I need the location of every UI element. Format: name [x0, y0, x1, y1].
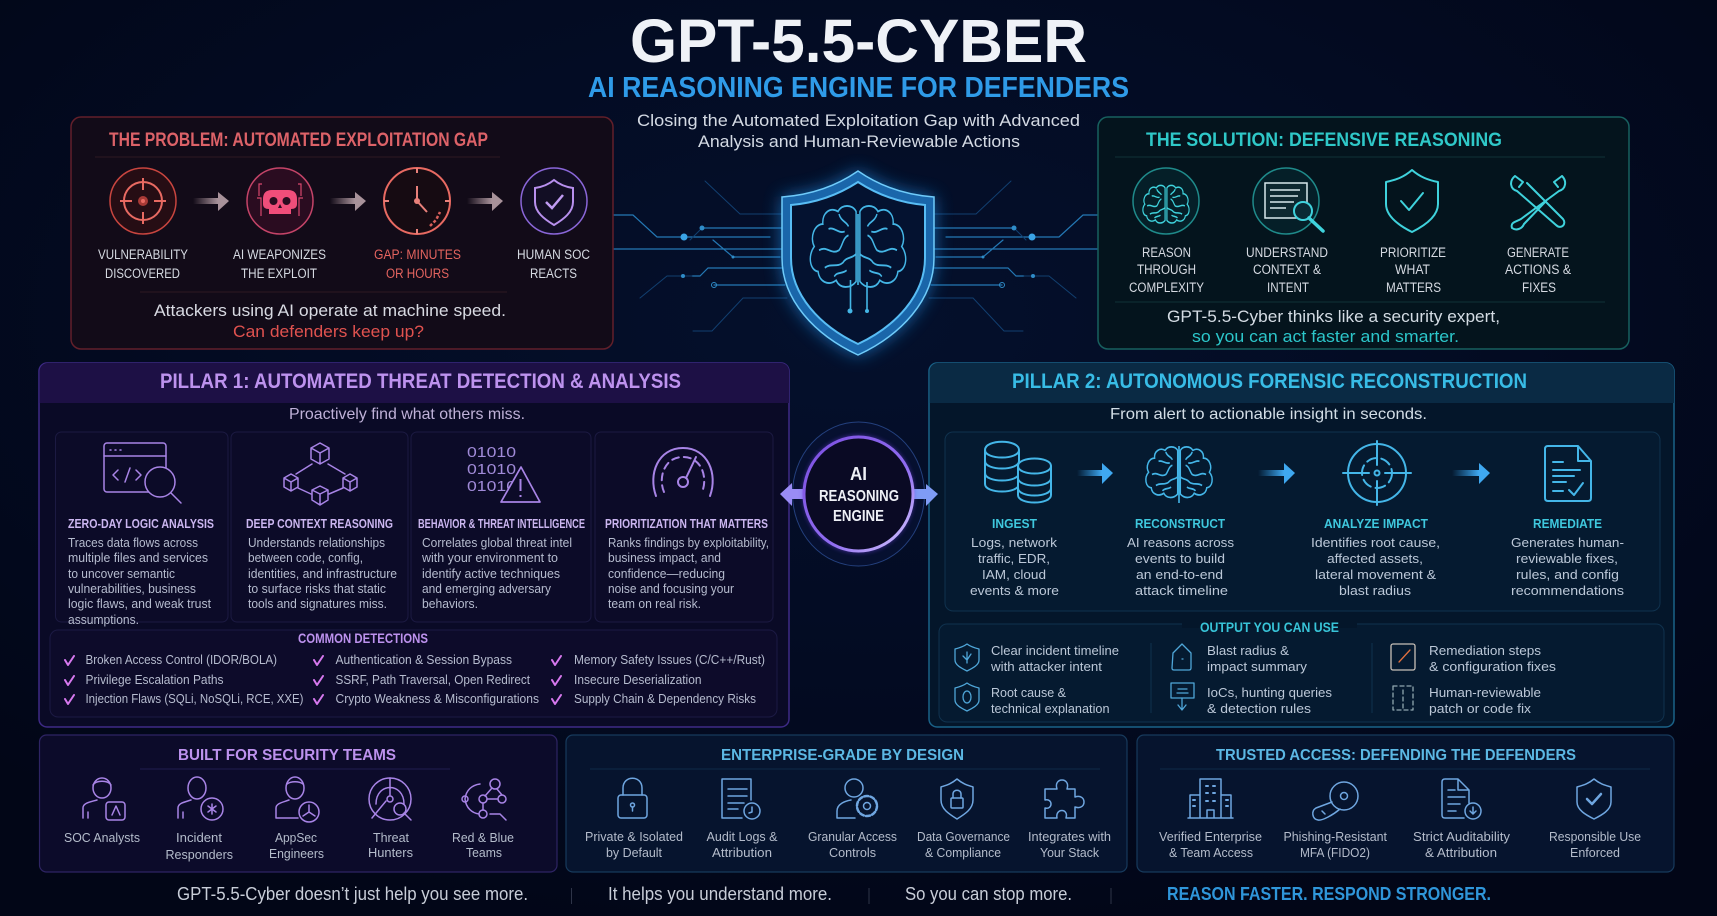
trusted access labels: Strict Auditability — [1413, 830, 1511, 844]
icon: gauge — [653, 448, 713, 496]
icon: target — [1343, 441, 1411, 505]
AI reasoning engine hub — [780, 422, 938, 566]
icon: brain — [1146, 446, 1212, 503]
detection list: Supply Chain & Dependency Risks — [574, 691, 756, 706]
card text: identify active techniques — [422, 566, 560, 581]
trusted access labels: MFA (FIDO2) — [1300, 846, 1370, 860]
output text: & configuration fixes — [1429, 659, 1557, 674]
card: prioritization that matters — [595, 432, 773, 622]
arrow — [1258, 463, 1295, 484]
icon: audit document — [1442, 779, 1481, 819]
enterprise labels: Private & Isolated — [585, 830, 683, 844]
output text: IoCs, hunting queries — [1207, 685, 1333, 700]
detection list: Crypto Weakness & Misconfigurations — [336, 691, 539, 706]
team labels: Threat — [373, 831, 410, 845]
problem step labels: DISCOVERED — [105, 266, 180, 281]
step text: remediate: recommendations — [1511, 583, 1625, 598]
icon: threat hunter — [369, 778, 411, 820]
icon: code window — [104, 443, 181, 503]
card text: noise and focusing your — [608, 581, 735, 596]
step text: ingest: events & more — [970, 583, 1059, 598]
icon: skull — [247, 168, 313, 234]
team labels: Red & Blue — [452, 831, 514, 845]
step text: analyze impact: blast radius — [1339, 583, 1412, 598]
enterprise labels — [585, 830, 1111, 860]
common detections heading: COMMON DETECTIONS — [298, 631, 428, 646]
solution labels: COMPLEXITY — [1129, 280, 1204, 295]
footer statement: GPT-5.5-Cyber doesn’t just help you see more. — [177, 884, 528, 904]
solution labels: WHAT — [1395, 262, 1430, 277]
icon: binary and warning: 01010 — [467, 444, 516, 461]
solution labels: GENERATE — [1507, 245, 1569, 260]
hub label: REASONING — [819, 488, 899, 505]
detection list: Authentication & Session Bypass — [336, 652, 512, 667]
icon: shield check — [1386, 170, 1438, 232]
card text — [246, 517, 397, 611]
trusted access labels: & Attribution — [1425, 846, 1497, 860]
card text: confidence—reducing — [608, 566, 725, 581]
icon: tools — [1511, 176, 1565, 229]
card text — [605, 517, 769, 611]
problem step labels: REACTS — [530, 266, 577, 281]
card text: identities, and infrastructure — [248, 566, 397, 581]
card text: ZERO-DAY LOGIC ANALYSIS — [68, 517, 214, 531]
output text: with attacker intent — [990, 659, 1102, 674]
output you can use — [939, 620, 1664, 722]
problem step labels — [98, 247, 590, 281]
panel: pillar 1 — [39, 363, 789, 727]
enterprise labels: Integrates with — [1028, 830, 1111, 844]
card text: Traces data flows across — [68, 535, 198, 550]
icon: clock — [384, 168, 450, 234]
common detections — [50, 630, 777, 717]
team labels: Responders — [166, 848, 233, 862]
detection list: Memory Safety Issues (C/C++/Rust) — [574, 652, 765, 667]
step text: analyze impact — [1311, 517, 1440, 598]
footer statement: REASON FASTER. RESPOND STRONGER. — [1167, 884, 1491, 904]
footer statement — [177, 884, 1491, 904]
problem step labels: THE EXPLOIT — [241, 266, 317, 281]
icon: cube network — [284, 443, 357, 505]
icon: target — [110, 168, 176, 234]
card text: business impact, and — [608, 550, 721, 565]
workflow box — [945, 432, 1660, 611]
card text: tools and signatures miss. — [248, 596, 387, 611]
card: behavior and threat intelligence — [411, 432, 591, 622]
tagline — [637, 111, 1080, 151]
trusted access labels: Responsible Use — [1549, 830, 1641, 844]
team labels — [64, 831, 514, 862]
trusted access labels: Enforced — [1570, 846, 1620, 860]
hub label — [819, 464, 899, 525]
output text: & detection rules — [1207, 701, 1312, 716]
enterprise labels: Audit Logs & — [706, 830, 778, 844]
card text: Ranks findings by exploitability, — [608, 535, 769, 550]
team labels: Teams — [466, 846, 502, 860]
step text: reconstruct: events to build — [1135, 551, 1225, 566]
icon: human shield — [521, 168, 587, 234]
step text: remediate: Generates human- — [1511, 535, 1624, 550]
pillar 2 heading: PILLAR 2: AUTONOMOUS FORENSIC RECONSTRUCTION — [1012, 370, 1527, 393]
icon: lock — [618, 778, 647, 818]
check marks — [65, 656, 561, 704]
panel: the problem — [71, 117, 613, 349]
detection list: Insecure Deserialization — [574, 672, 702, 687]
solution labels: MATTERS — [1386, 280, 1441, 295]
solution labels: INTENT — [1267, 280, 1309, 295]
icon: databases — [985, 442, 1051, 502]
trusted access labels: Phishing-Resistant — [1284, 830, 1388, 844]
enterprise labels: Granular Access — [808, 830, 897, 844]
arrow — [330, 192, 366, 211]
panel: the solution — [1098, 117, 1629, 349]
output text: Blast radius & — [1207, 643, 1289, 658]
problem step labels: OR HOURS — [386, 266, 449, 281]
icon: responsible use shield — [1577, 779, 1611, 819]
step text: ingest: traffic, EDR, — [978, 551, 1050, 566]
icon: incident responder — [178, 777, 223, 820]
card text: Understands relationships — [248, 535, 385, 550]
step text: remediate — [1511, 517, 1625, 598]
icon: SOC analyst — [83, 778, 125, 820]
enterprise labels: Controls — [829, 846, 876, 860]
enterprise labels: Attribution — [712, 846, 772, 860]
problem step labels: AI WEAPONIZES — [233, 247, 326, 262]
problem conclusion — [154, 301, 506, 341]
output text: Root cause & — [991, 685, 1066, 700]
output text: impact summary — [1207, 659, 1308, 674]
solution labels: THROUGH — [1137, 262, 1196, 277]
step text: ingest: INGEST — [992, 517, 1037, 531]
circuit traces — [613, 181, 1103, 331]
tagline: Closing the Automated Exploitation Gap with Advanced — [637, 111, 1080, 130]
step text: remediate: rules, and config — [1516, 567, 1619, 582]
output text: Human-reviewable — [1429, 685, 1541, 700]
hub label: ENGINE — [833, 508, 884, 525]
card text: team on real risk. — [608, 596, 701, 611]
subtitle: AI REASONING ENGINE FOR DEFENDERS — [588, 72, 1129, 104]
step text: analyze impact: ANALYZE IMPACT — [1324, 517, 1428, 531]
team labels: Hunters — [368, 846, 413, 860]
step text: reconstruct: an end-to-end — [1136, 567, 1223, 582]
arrow left — [780, 483, 806, 506]
panel: enterprise-grade by design — [566, 735, 1127, 872]
card text: between code, config, — [248, 550, 363, 565]
step text: remediate: REMEDIATE — [1533, 517, 1602, 531]
detection list: Injection Flaws (SQLi, NoSQLi, RCE, XXE) — [86, 691, 304, 706]
step text: remediate: reviewable fixes, — [1516, 551, 1618, 566]
arrow — [467, 192, 503, 211]
step text: reconstruct — [1127, 517, 1235, 598]
card text: behaviors. — [422, 596, 478, 611]
title: GPT-5.5-CYBER — [630, 7, 1087, 75]
card text: vulnerabilities, business — [68, 581, 196, 596]
hub label: AI — [850, 464, 867, 484]
output text: patch or code fix — [1429, 701, 1532, 716]
panel: built for security teams — [40, 735, 557, 872]
card text — [68, 517, 214, 627]
solution labels: UNDERSTAND — [1246, 245, 1328, 260]
card: deep context reasoning — [231, 432, 408, 622]
step text: ingest: IAM, cloud — [982, 567, 1046, 582]
step text: ingest: Logs, network — [971, 535, 1058, 550]
card text: to uncover semantic — [68, 566, 175, 581]
team labels: Engineers — [269, 847, 324, 861]
solution labels: ACTIONS & — [1505, 262, 1571, 277]
step text: ingest — [970, 517, 1059, 598]
trusted access labels: & Team Access — [1169, 846, 1253, 860]
card text — [418, 517, 585, 611]
trusted access labels: Verified Enterprise — [1159, 830, 1262, 844]
icon: audit log — [722, 779, 760, 819]
card text: and emerging adversary — [422, 581, 551, 596]
pillar 1 tagline: Proactively find what others miss. — [289, 406, 525, 423]
solution conclusion: GPT-5.5-Cyber thinks like a security expert, — [1167, 307, 1500, 326]
card text: with your environment to — [421, 550, 558, 565]
output heading: OUTPUT YOU CAN USE — [1200, 620, 1339, 635]
trusted access labels — [1159, 830, 1641, 860]
icon: brain — [1133, 168, 1199, 234]
solution labels — [1129, 245, 1571, 295]
detection list: Privilege Escalation Paths — [86, 672, 224, 687]
output text: technical explanation — [991, 701, 1110, 716]
arrow — [1452, 463, 1490, 484]
card text: Correlates global threat intel — [422, 535, 572, 550]
enterprise labels: Your Stack — [1040, 846, 1100, 860]
heading: BUILT FOR SECURITY TEAMS — [178, 747, 396, 764]
icon: binary and warning: 01010 — [467, 478, 516, 495]
card text: to surface risks that static — [248, 581, 386, 596]
step text: reconstruct: RECONSTRUCT — [1135, 517, 1225, 531]
panel: pillar 2 — [929, 363, 1674, 727]
icon: binary and warning — [467, 444, 540, 502]
problem step labels: VULNERABILITY — [98, 247, 188, 262]
icon: central shield with brain — [782, 171, 934, 355]
solution heading: THE SOLUTION: DEFENSIVE REASONING — [1146, 130, 1502, 151]
detection list — [86, 652, 765, 706]
team labels: AppSec — [275, 831, 317, 845]
solution labels: FIXES — [1522, 280, 1556, 295]
icon: key — [1313, 782, 1358, 820]
solution labels: CONTEXT & — [1253, 262, 1321, 277]
heading: ENTERPRISE-GRADE BY DESIGN — [721, 747, 964, 764]
card text: BEHAVIOR & THREAT INTELLIGENCE — [418, 517, 585, 531]
icon: red and blue team network — [462, 779, 506, 820]
step text: reconstruct: attack timeline — [1135, 583, 1228, 598]
problem heading: THE PROBLEM: AUTOMATED EXPLOITATION GAP — [109, 130, 488, 151]
step text: analyze impact: lateral movement & — [1315, 567, 1436, 582]
step text: reconstruct: AI reasons across — [1127, 535, 1235, 550]
solution labels: REASON — [1142, 245, 1191, 260]
card text: multiple files and services — [68, 550, 208, 565]
heading: TRUSTED ACCESS: DEFENDING THE DEFENDERS — [1216, 747, 1576, 764]
card text: DEEP CONTEXT REASONING — [246, 517, 393, 531]
tagline: Analysis and Human-Reviewable Actions — [698, 132, 1020, 151]
footer statement: So you can stop more. — [905, 884, 1072, 904]
team labels: SOC Analysts — [64, 831, 140, 845]
icon: building — [1188, 779, 1233, 818]
detection list: Broken Access Control (IDOR/BOLA) — [86, 652, 277, 667]
step text: analyze impact: Identifies root cause, — [1311, 535, 1440, 550]
card text: PRIORITIZATION THAT MATTERS — [605, 517, 768, 531]
pillar 2 tagline: From alert to actionable insight in seconds. — [1110, 406, 1427, 423]
footer statement: It helps you understand more. — [608, 884, 832, 904]
icon: user and gear — [837, 779, 877, 818]
problem conclusion: Attackers using AI operate at machine speed. — [154, 301, 506, 320]
icon: document check — [1545, 446, 1591, 501]
solution conclusion — [1167, 307, 1500, 346]
card text: assumptions. — [68, 612, 139, 627]
detection list: SSRF, Path Traversal, Open Redirect — [336, 672, 530, 687]
icon: puzzle — [1045, 780, 1084, 818]
icon: document and magnifier — [1253, 168, 1323, 234]
enterprise labels: Data Governance — [917, 830, 1010, 844]
solution conclusion: so you can act faster and smarter. — [1192, 327, 1459, 346]
arrow — [193, 192, 229, 211]
team labels: Incident — [176, 831, 223, 845]
output text: Remediation steps — [1429, 643, 1542, 658]
arrow right — [911, 484, 938, 506]
card: zero-day logic analysis — [56, 432, 228, 627]
icon: appsec engineer — [276, 777, 319, 822]
pillar 1 heading: PILLAR 1: AUTOMATED THREAT DETECTION & ANALYSIS — [160, 370, 681, 393]
arrow — [1077, 463, 1113, 484]
card text: logic flaws, and weak trust — [68, 596, 211, 611]
step text: analyze impact: affected assets, — [1327, 551, 1423, 566]
problem step labels: GAP: MINUTES — [374, 247, 461, 262]
enterprise labels: by Default — [606, 846, 663, 860]
output text — [990, 643, 1557, 716]
icon: binary and warning: 01010 — [467, 461, 516, 478]
problem conclusion: Can defenders keep up? — [233, 322, 424, 341]
panel: trusted access — [1137, 735, 1674, 872]
icon: shield lock — [941, 779, 973, 819]
output icons — [955, 644, 1415, 711]
problem step labels: HUMAN SOC — [517, 247, 590, 262]
enterprise labels: & Compliance — [925, 846, 1001, 860]
output text: Clear incident timeline — [991, 643, 1119, 658]
solution labels: PRIORITIZE — [1380, 245, 1446, 260]
